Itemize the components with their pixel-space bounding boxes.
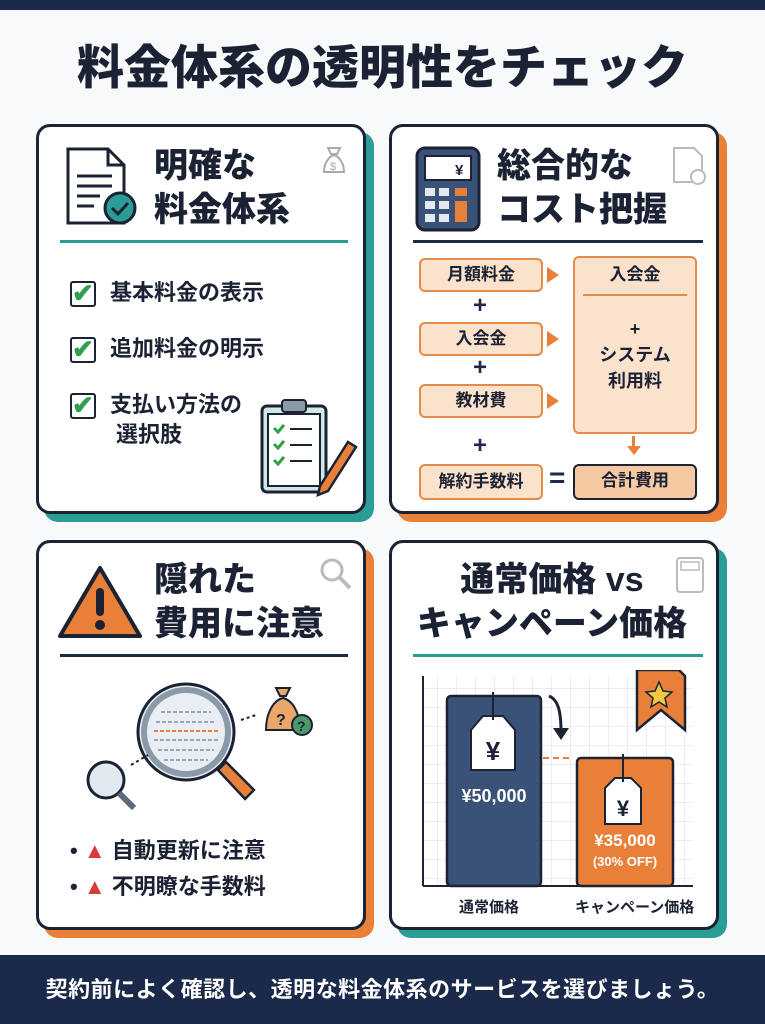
cost flow diagram: 解約手数料 [438,472,524,491]
icon: small magnifier faded [320,558,352,590]
icon: calculator [416,146,480,232]
heading: 通常価格 vs [460,561,644,599]
checklist: 支払い方法の [110,392,242,417]
warning list: • ▲ 自動更新に注意 [70,838,266,863]
bar chart: ¥50,000 [461,786,527,806]
heading [417,561,687,643]
cost flow diagram: 合計費用 [601,471,669,490]
heading: キャンペーン価格 [417,605,687,643]
cost flow diagram: + [473,354,487,381]
icon: warning [58,566,142,638]
heading [497,147,667,229]
heading: 総合的な [497,147,633,185]
axis labels [459,899,694,916]
checklist: ✔ [72,390,94,420]
top strip [0,0,765,10]
icon: calculator: ¥ [455,162,464,179]
axis labels: キャンペーン価格 [575,899,694,916]
heading: コスト把握 [497,191,667,229]
panel: regular vs campaign [389,540,727,938]
icon: money bag: $ [330,161,336,173]
footer: 契約前によく確認し、透明な料金体系のサービスを選びましょう。 [46,977,719,1002]
illustration: magnifiers and money bag: ? [276,712,286,729]
illustration: magnifiers and money bag: ? [297,718,306,734]
heading [154,561,324,643]
heading: 隠れた [154,561,256,599]
checklist [70,278,264,447]
heading: 明確な [154,147,256,185]
panel: total cost [389,124,727,522]
warning list [70,838,266,899]
bar chart: (30% OFF) [593,854,657,869]
panel: hidden costs [36,540,374,938]
cost flow diagram: + [630,319,640,339]
bar chart: ¥ [617,796,630,821]
cost flow diagram: = [549,462,565,493]
panel: clear pricing [36,124,374,522]
cost flow diagram: 入会金 [456,329,506,348]
checklist: 追加料金の明示 [110,336,264,361]
warning list: • ▲ 不明瞭な手数料 [70,874,266,899]
icon: calculator faded [676,557,704,593]
title: 料金体系の透明性をチェック [77,41,688,94]
illustration: magnifiers and money bag [86,682,313,810]
icon: document check [66,148,136,224]
heading: 費用に注意 [154,605,324,643]
bar chart [422,670,693,888]
bar chart: ¥35,000 [594,831,656,850]
icon: doc faded [673,147,706,185]
checklist: ✔ [72,334,94,364]
cost flow diagram: + [473,292,487,319]
cost flow diagram: システム [599,345,671,365]
checklist: ✔ [72,278,94,308]
footer [0,955,765,1024]
icon: money bag [323,147,345,173]
heading: 料金体系 [154,191,290,229]
cost flow diagram: 入会金 [610,265,660,284]
cost flow diagram [419,256,697,500]
cost flow diagram: 月額料金 [447,265,515,284]
cost flow diagram: + [473,432,487,459]
icon: clipboard [260,399,358,497]
cost flow diagram: 利用料 [608,371,662,391]
cost flow diagram: 教材費 [456,391,506,410]
bar chart: ¥ [486,736,501,766]
checklist: 選択肢 [116,422,182,447]
checklist: 基本料金の表示 [110,280,264,305]
axis labels: 通常価格 [459,899,519,916]
heading [154,147,290,229]
